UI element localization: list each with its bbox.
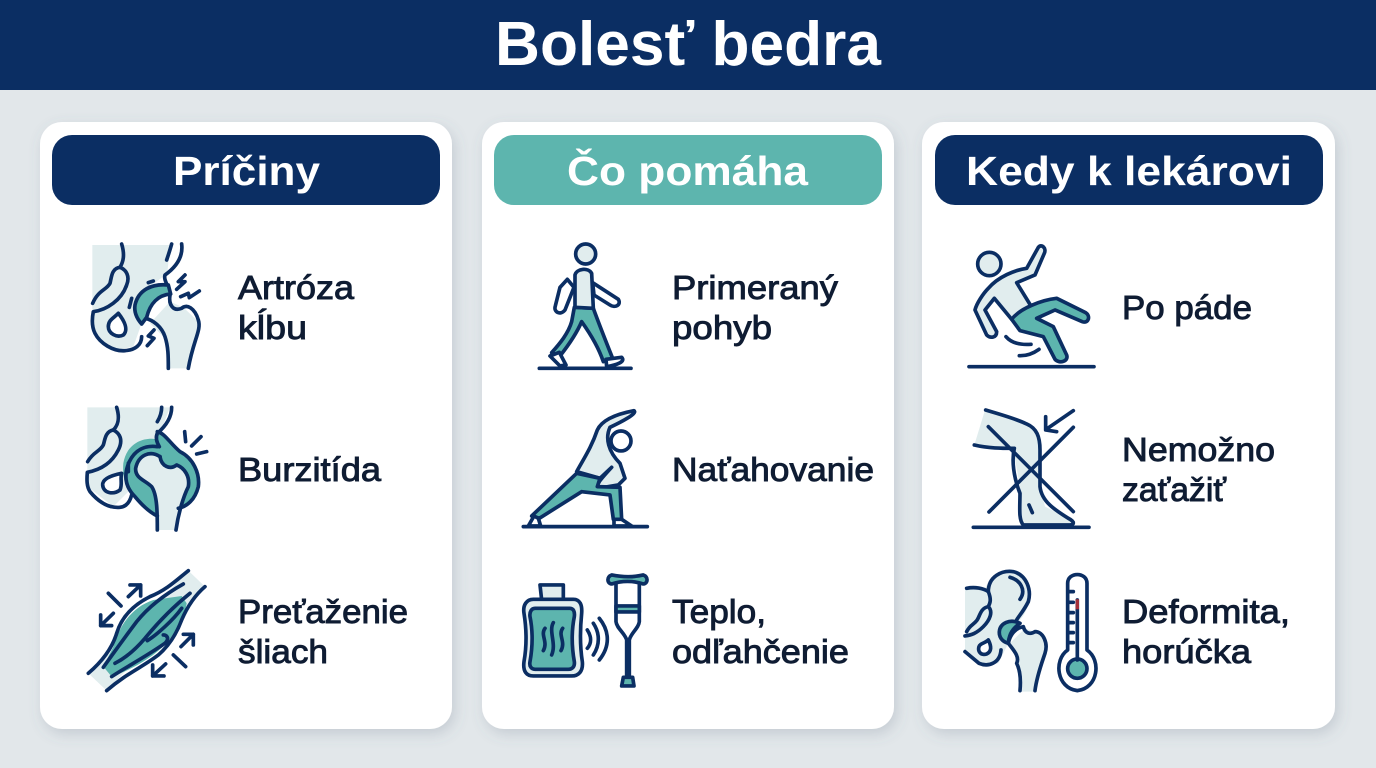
panel: causes [40,122,452,729]
icon: tendon overload [88,571,205,691]
text: arthrosis [238,269,355,346]
text: cannot bear weight: Nemožno [1122,431,1275,468]
text: tendon overload [238,593,408,670]
panel: what helps [482,122,894,729]
heading: when to see a doctor: Kedy k lekárovi [966,148,1292,194]
text: stretching: Naťahovanie [672,451,874,488]
icon: hip deformity and thermometer [965,571,1096,692]
text: heat and unloading [672,593,849,670]
title banner: Bolesť bedra [495,10,882,79]
text: movement [672,269,839,346]
text: movement: Primeraný [672,269,839,306]
text: deformity, fever [1122,593,1290,670]
text: after a fall: Po páde [1122,289,1252,326]
icon: stretching person [523,411,647,527]
icon: unable to bear weight [973,410,1089,527]
text: bursitis: Burzitída [238,451,382,488]
heading: what helps: Čo pomáha [567,148,809,194]
text: cannot bear weight [1122,431,1275,508]
text: tendon overload: Preťaženie [238,593,408,630]
text: heat and unloading: Teplo, [672,593,766,630]
text: deformity, fever: horúčka [1122,633,1252,670]
text: movement: pohyb [672,309,772,346]
text: heat and unloading: odľahčenie [672,633,849,670]
icon: falling person [969,246,1094,367]
title banner [0,0,1376,90]
text: deformity, fever: Deformita, [1122,593,1290,630]
text: tendon overload: šliach [238,633,328,670]
text: arthrosis: kĺbu [238,308,307,346]
heading: what helps [494,135,882,205]
text: arthrosis: Artróza [238,269,355,306]
icon: bursitis [87,407,207,530]
icon: hot water bottle and crutch [524,575,647,686]
panel: when to see a doctor [922,122,1335,729]
text: cannot bear weight: zaťažiť [1122,471,1227,508]
heading: causes: Príčiny [173,148,320,194]
icon: hip arthrosis [92,244,199,368]
heading: when to see a doctor [935,135,1323,205]
icon: walking person [539,244,631,368]
heading: causes [52,135,440,205]
